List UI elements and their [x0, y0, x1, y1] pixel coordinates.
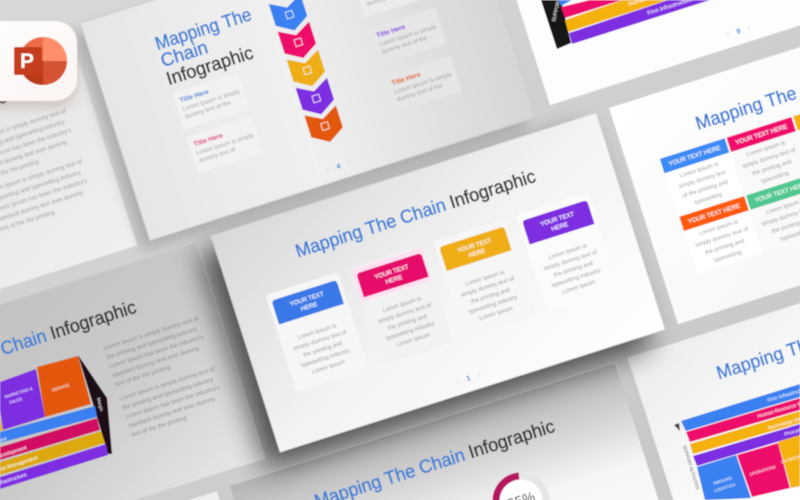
text block 2: Lorem Ipsum is simply dummy text of	[119, 367, 216, 403]
card 2: pink: YOUR TEXT	[374, 264, 410, 281]
grid card: orange: simply dummy text of	[695, 226, 749, 249]
card 1: blue: the printing and	[303, 341, 343, 359]
card 4: purple: YOUR TEXT	[539, 211, 575, 228]
card: purple title: Title Here	[376, 24, 407, 40]
card 2: pink: the printing and	[387, 314, 428, 332]
title: Mapping The	[152, 3, 254, 54]
chart: lower left value chain: MARKETING &	[4, 386, 33, 399]
card 4: purple: Lorem Ipsum is	[548, 243, 588, 261]
grid card: yellow	[793, 96, 800, 174]
chart: lower left value chain: SALES	[8, 396, 23, 405]
card 1: blue: HERE	[300, 301, 318, 313]
card 3: yellow	[433, 219, 537, 339]
card: purple title: dummy text of the	[381, 35, 429, 56]
grid card: blue: simply dummy text	[678, 170, 727, 190]
grid card: pink: typesetting	[761, 171, 790, 185]
chart: bottom right value chain: INBOUND	[713, 475, 733, 486]
card 4: purple: typesetting industry	[551, 268, 601, 289]
card: blue title: dummy text of the	[185, 100, 232, 121]
slide: center card infographic	[211, 113, 665, 452]
text block 2: the printing and typesetting industry	[122, 377, 214, 412]
grid card: blue: of the printing and	[682, 180, 729, 200]
text block 1	[0, 109, 79, 183]
card: orange title	[383, 55, 462, 113]
card: blue title: Title Here	[179, 88, 210, 104]
card 3: yellow: HERE	[468, 248, 486, 259]
card 2: pink: HERE	[385, 274, 403, 286]
grid card: pink	[727, 117, 800, 195]
card 4: purple	[516, 192, 620, 312]
pagination: slide 9: 9	[736, 28, 742, 36]
card 4: purple: simply dummy text of	[543, 250, 598, 272]
grid card: green	[746, 175, 800, 253]
card 3: yellow: the printing and	[470, 287, 511, 305]
card 2: pink: Lorem Ipsum is	[382, 296, 422, 314]
title: Infographic	[164, 42, 256, 89]
card 3: yellow: Lorem Ipsum	[479, 306, 514, 322]
card 1: blue: Lorem Ipsum	[311, 359, 346, 376]
card: pink title: Title Here	[193, 132, 224, 148]
text block 2: standard dummy text ever dummy	[128, 396, 216, 430]
pagination: slide 4: ‹	[326, 166, 331, 174]
grid card: orange: the printing and	[705, 238, 745, 256]
slide: far left text	[0, 29, 137, 368]
chart: bottom right value chain: LOGISTICS	[713, 482, 736, 493]
grid card: blue: Lorem Ipsum is	[679, 162, 719, 179]
pagination: slide 4	[326, 160, 352, 174]
slide: chevron infographic	[81, 0, 535, 240]
chart: lower left value chain: Margin	[96, 397, 104, 412]
chart: bottom right value chain: SUPPORT ACTIVITIES	[682, 445, 700, 490]
slide: top right value chain	[481, 0, 800, 105]
chevron: purple	[296, 78, 337, 119]
text block 2: text of the the printing	[0, 210, 56, 233]
card: pink title	[186, 116, 264, 174]
grid card: pink: YOUR TEXT HERE	[735, 123, 788, 146]
slide shadow: chevron slide	[74, 0, 528, 250]
chart: lower left value chain	[0, 355, 112, 491]
card: purple title: Lorem Ipsum is simply	[379, 24, 437, 48]
pagination: slide 1: 1	[466, 375, 472, 383]
grid card: pink: simply dummy text of	[742, 147, 797, 170]
text block 2: Lorem Ipsum has been the industry's	[125, 385, 220, 421]
center slide shadow	[198, 131, 652, 470]
chart: top right value chain bands	[541, 0, 710, 49]
card: blue title: Lorem Ipsum is simply	[182, 89, 241, 113]
card: orange title: Lorem Ipsum is simply	[394, 72, 453, 96]
card 3: yellow: Lorem Ipsum is	[465, 270, 505, 288]
card: blue title	[172, 73, 250, 130]
card: orange title: Title Here	[391, 71, 422, 87]
text block 2	[0, 159, 95, 233]
card 2: pink	[350, 245, 453, 365]
card 3: yellow: YOUR TEXT	[457, 237, 493, 255]
card 1: blue: YOUR TEXT	[289, 291, 325, 308]
pagination: slide 1: ›	[477, 372, 482, 379]
card: purple title	[368, 8, 446, 65]
slide: lower bottom edge piece	[0, 491, 286, 500]
card: pink title: Lorem Ipsum is simply	[196, 133, 255, 157]
chevron: orange	[304, 105, 346, 147]
grid card: pink: the printing and	[752, 159, 792, 177]
text block 2	[119, 367, 227, 439]
card: orange title: dummy text of the	[396, 83, 444, 103]
text block 1	[103, 316, 211, 388]
pagination: slide 4: ›	[347, 160, 352, 167]
title	[152, 3, 265, 89]
pagination: slide 1	[456, 372, 482, 386]
text block 1: Lorem Ipsum is simply dummy text of	[103, 316, 200, 352]
grid card: blue: YOUR TEXT HERE	[668, 145, 722, 168]
icon: PowerPoint app: P	[20, 50, 34, 73]
card 1: blue: Lorem Ipsum is	[297, 323, 337, 341]
grid card: orange: typesetting	[713, 250, 742, 264]
chart: bottom right value chain: OPERATIONS	[749, 464, 776, 477]
text block 1: the printing and typesetting industry	[106, 327, 198, 361]
grid card: orange: Lorem Ipsum is	[699, 219, 739, 237]
title: Mapping The Chain Infographic	[293, 165, 538, 261]
chevron: yellow	[287, 50, 328, 91]
text block 2: text of the the printing	[131, 415, 188, 439]
pagination: slide 4: 4	[336, 163, 342, 171]
grid card: blue	[660, 138, 743, 216]
card 2: pink: typesetting industry	[385, 321, 436, 342]
card 1: blue: typesetting industry	[301, 348, 351, 369]
slide: right card grid	[609, 0, 800, 324]
chevron: blue	[269, 0, 310, 35]
card 2: pink: Lorem Ipsum	[396, 332, 431, 349]
chevron: pink	[278, 22, 319, 63]
icon shadow	[0, 28, 77, 108]
card 1: blue	[266, 272, 369, 392]
card 4: purple: the printing and	[553, 261, 594, 279]
title: Chain	[158, 36, 210, 71]
pagination: slide 9: ›	[747, 25, 752, 32]
card 2: pink: simply dummy text of	[378, 303, 432, 325]
text block 1: Lorem Ipsum has been the industry's	[109, 335, 204, 370]
grid card: orange: YOUR TEXT HERE	[687, 202, 741, 226]
chart: bottom right value chain	[674, 384, 800, 500]
pagination: slide 9: ‹	[726, 31, 731, 39]
pagination: slide 9	[726, 25, 752, 39]
text block 1: standard dummy text ever dummy	[112, 346, 200, 379]
icon: PowerPoint app	[0, 21, 77, 101]
grid card: blue: typesetting	[694, 192, 723, 206]
card 4: purple: HERE	[551, 221, 569, 233]
card 4: purple: Lorem Ipsum	[562, 279, 596, 296]
chart: lower left value chain: SERVICE	[51, 382, 70, 393]
card 1: blue: simply dummy text of	[293, 330, 348, 352]
card 3: yellow: simply dummy text of	[460, 276, 515, 299]
grid card: pink: Lorem Ipsum is	[746, 140, 786, 158]
card: pink title: dummy text of	[199, 147, 237, 164]
card: right top	[353, 0, 431, 18]
grid card: orange	[679, 196, 762, 274]
pagination: slide 1: ‹	[456, 378, 461, 386]
card 3: yellow: typesetting industry	[468, 295, 519, 316]
text block 1: text of the the printing	[115, 365, 171, 388]
chart: donut 55%	[493, 473, 549, 500]
slide: lower left value chain	[0, 242, 265, 500]
